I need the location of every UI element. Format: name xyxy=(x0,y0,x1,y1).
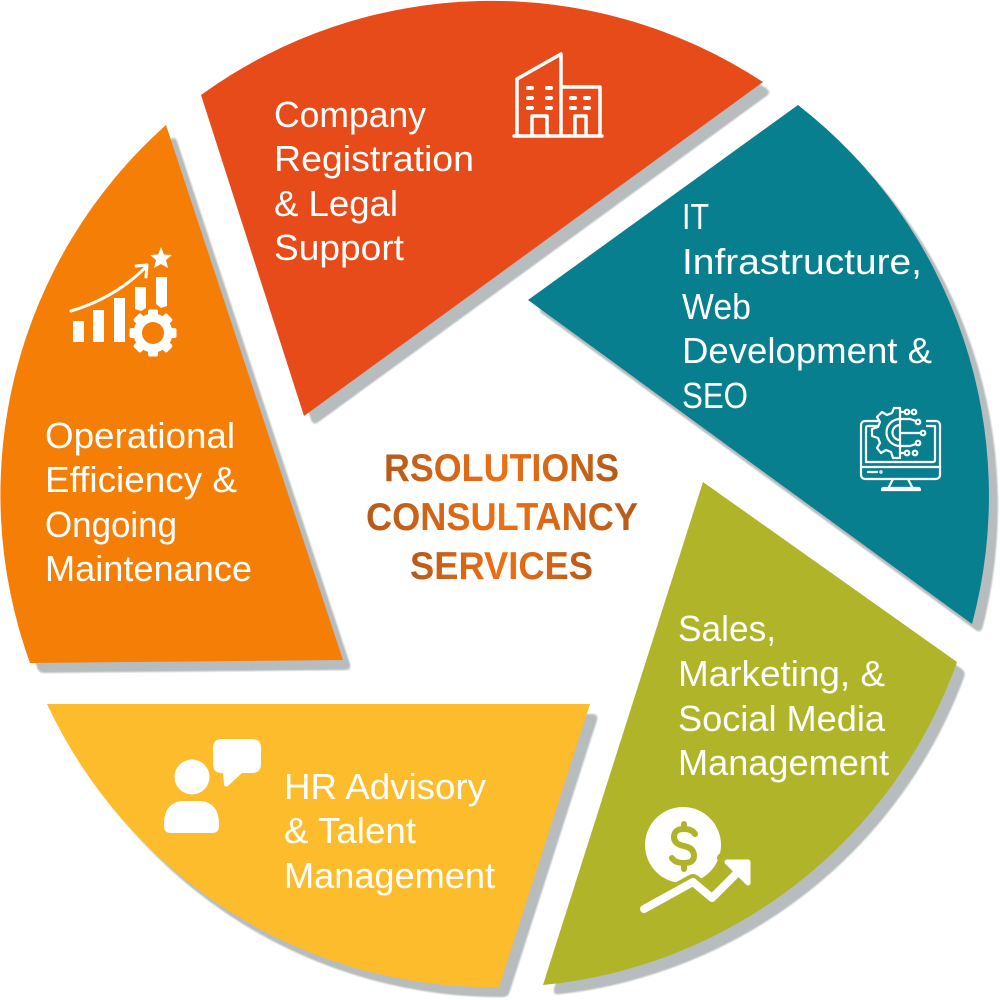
center title: CONSULTANCY xyxy=(366,496,638,539)
label: operational efficiency: Maintenance xyxy=(45,548,252,589)
label: HR advisory xyxy=(284,766,495,896)
label: company registration xyxy=(274,94,474,268)
label: IT infrastructure: SEO xyxy=(682,375,748,416)
label: sales and marketing: Social Media xyxy=(678,698,886,739)
label: company registration: Company xyxy=(274,94,426,135)
panel: sales and marketing xyxy=(543,482,957,985)
panel: HR advisory xyxy=(47,704,590,987)
label: operational efficiency: Efficiency & xyxy=(45,459,237,500)
icon: dollar coin and rising arrow xyxy=(644,807,755,909)
label: operational efficiency: Operational xyxy=(45,415,235,456)
label: HR advisory: HR Advisory xyxy=(284,766,486,807)
label: company registration: Registration xyxy=(274,138,474,179)
icon: growth chart with gear and star xyxy=(71,247,176,356)
icon: monitor with gear circuit xyxy=(861,408,940,490)
label: IT infrastructure: Development & xyxy=(682,330,932,371)
label: sales and marketing: Management xyxy=(678,742,889,783)
label: IT infrastructure: IT xyxy=(682,196,709,237)
label: IT infrastructure xyxy=(682,196,932,416)
center title xyxy=(366,447,638,588)
label: HR advisory: Management xyxy=(284,855,495,896)
icon: office buildings xyxy=(514,54,602,136)
panel: IT infrastructure xyxy=(528,105,989,624)
label: HR advisory: & Talent xyxy=(284,810,416,851)
label: operational efficiency: Ongoing xyxy=(45,504,177,545)
label: sales and marketing: Marketing, & xyxy=(678,653,885,694)
label: IT infrastructure: Infrastructure, xyxy=(682,241,922,282)
label: company registration: Support xyxy=(274,227,404,268)
label: company registration: & Legal xyxy=(274,183,398,224)
label: IT infrastructure: Web xyxy=(682,286,751,327)
center title: SERVICES xyxy=(410,545,593,588)
label: sales and marketing xyxy=(678,608,889,783)
label: operational efficiency xyxy=(45,415,252,589)
panel: operational efficiency xyxy=(0,125,343,663)
label: sales and marketing: Sales, xyxy=(678,608,776,649)
center title: RSOLUTIONS xyxy=(384,447,619,490)
panel: company registration xyxy=(201,1,763,416)
icon: person with speech bubble xyxy=(164,739,261,833)
